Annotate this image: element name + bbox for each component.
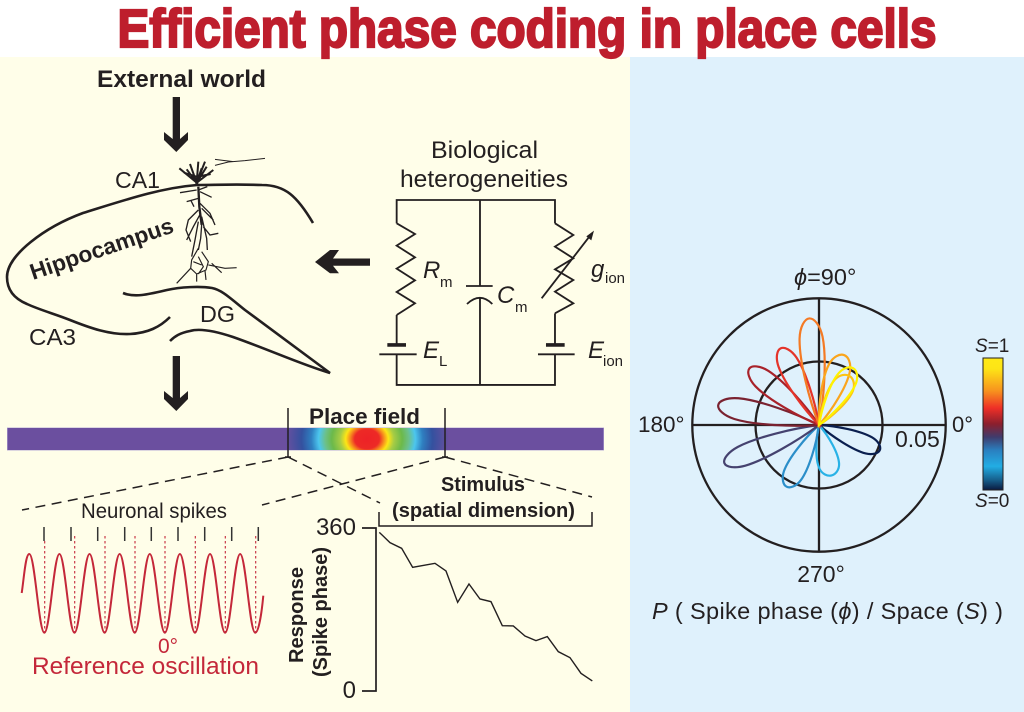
label: E ion (588, 337, 623, 370)
label: DG: DG (200, 301, 235, 327)
arrow: circuit to hippocampus (315, 250, 370, 273)
panel: blue background (630, 57, 1024, 712)
tick label: 360: 360 (316, 514, 356, 541)
battery: E ion (538, 352, 575, 357)
label: Rm (423, 257, 452, 291)
label: EL (423, 337, 447, 370)
label: 0: 0° (952, 412, 973, 437)
circuit wiring (379, 200, 594, 385)
variable resistor arrow (542, 235, 591, 298)
diagram: circuit (379, 200, 625, 385)
axis label (286, 547, 332, 677)
stimulus bracket (379, 512, 592, 526)
label: stimulus: (spatial dimension) (392, 500, 575, 522)
label: E ion: ion (603, 353, 623, 370)
arrow head (586, 231, 594, 240)
resistor: g ion (555, 223, 573, 313)
title: Efficient phase coding in place cells (118, 0, 936, 59)
outline: CA1 to CA3 (7, 185, 313, 334)
thick plate right (546, 339, 565, 350)
label: S=1: S=1 (975, 336, 1009, 357)
label: Rm: R (423, 257, 440, 284)
capacitor: Cm (466, 286, 493, 304)
label: EL: L (439, 353, 447, 370)
label: stimulus: Stimulus (441, 474, 525, 496)
label: phi 90: ϕ=90° (794, 264, 856, 290)
label: Cm (497, 282, 528, 316)
label: EL: E (423, 337, 440, 364)
label: CA1: CA1 (115, 167, 160, 193)
label: Cm: m (515, 299, 528, 316)
arrow: hippocampus to place field (164, 356, 188, 411)
axis label: (Spike phase) (310, 547, 332, 677)
heading: biological heterogeneities: Biological (431, 137, 538, 164)
heading: external world: External world (97, 66, 266, 93)
label: 0 degrees: 0° (158, 635, 178, 658)
label: 270: 270° (797, 561, 845, 587)
arrow: external world to hippocampus (164, 97, 188, 152)
label: CA3: CA3 (29, 324, 76, 350)
heading: biological heterogeneities (400, 137, 568, 193)
polar grid (692, 298, 946, 552)
axis label: Response (286, 567, 308, 663)
panel: yellow background (0, 57, 630, 712)
tick label: 0: 0 (343, 677, 356, 704)
label: stimulus (392, 474, 575, 522)
label: 0.05: 0.05 (895, 426, 940, 452)
bracket lines (285, 408, 448, 457)
dashed zoom lines (22, 457, 592, 510)
data line (379, 532, 592, 681)
chart: response vs stimulus (286, 514, 592, 704)
diagram: hippocampus (7, 158, 330, 373)
chart: reference oscillation wave (22, 554, 263, 633)
caption: probability formula: P ( Spike phase (ϕ) / Space (S) ) (652, 598, 1003, 624)
thick plate left (387, 339, 406, 350)
label: hippocampus: Hippocampus (27, 213, 177, 285)
chart: polar plot (638, 264, 973, 587)
outline: dentate gyrus (123, 287, 330, 373)
label: g ion (591, 256, 625, 287)
spike raster (44, 527, 258, 541)
axis (362, 528, 376, 691)
battery: EL (379, 352, 417, 357)
label: E ion: E (588, 337, 605, 364)
icon: pyramidal neuron (177, 158, 265, 283)
label: g ion: g (591, 256, 605, 283)
label: place field: Place field (309, 404, 420, 429)
chart: place field bar (7, 404, 604, 457)
label: 180: 180° (638, 412, 685, 437)
reference lines: spike phase (45, 536, 256, 632)
resistor: Rm (397, 223, 415, 315)
label: g ion: ion (605, 270, 625, 287)
polar petals (716, 317, 883, 491)
label: S=0: S=0 (975, 491, 1009, 512)
label: neuronal spikes: Neuronal spikes (81, 499, 227, 523)
legend: colour bar (975, 336, 1009, 512)
label: Cm: C (497, 282, 515, 309)
heading: biological heterogeneities: heterogeneities (400, 166, 568, 193)
label: reference oscillation: Reference oscillation (32, 653, 259, 680)
label: Rm: m (440, 274, 452, 291)
